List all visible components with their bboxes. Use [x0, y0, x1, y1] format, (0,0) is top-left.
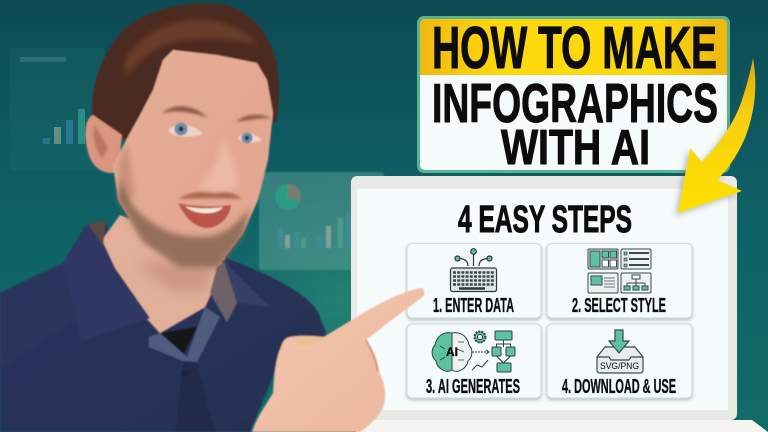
laptop base: [356, 420, 768, 432]
AI text on brain: AI: [446, 345, 458, 359]
heading: 4 easy steps: 4 EASY STEPS: [458, 199, 632, 241]
card 2: select style: [547, 244, 692, 318]
face side shading: [118, 142, 135, 205]
title line 3: WITH AI: [501, 121, 650, 175]
undershirt: [160, 327, 197, 356]
eyebrows: [162, 106, 208, 118]
icon: four layout templates: [588, 249, 651, 293]
card 1: enter data: [407, 244, 541, 318]
icon: AI brain to flowchart: [432, 331, 515, 372]
collar right: [220, 257, 270, 307]
arrow: yellow curved: [675, 58, 755, 216]
beard shading: [118, 178, 250, 268]
yellow title band: [420, 19, 727, 75]
right eye: [238, 133, 262, 143]
ear: [85, 115, 122, 173]
nose: [199, 140, 237, 191]
label: 2. SELECT STYLE: [572, 295, 666, 317]
shirt placket: [149, 307, 220, 362]
person: [0, 3, 424, 432]
laptop screen: [357, 189, 728, 410]
neck: [102, 215, 225, 333]
hair highlight: [125, 20, 258, 78]
label: 1. ENTER DATA: [433, 295, 514, 317]
ghost dashboard panel: bar chart: [10, 48, 105, 170]
thumb: [292, 336, 325, 346]
collar left: [63, 224, 150, 341]
hair base: [92, 3, 279, 140]
knuckle crease: [366, 340, 378, 372]
laptop: [351, 176, 768, 432]
ghost dashboard panel: pie and bars: [259, 172, 384, 270]
icon: download tray: [597, 330, 643, 373]
face: [113, 50, 273, 268]
card 4: download and use: [547, 324, 692, 398]
moustache: [178, 192, 242, 199]
laptop lid: [351, 176, 737, 420]
card 3: AI generates: [407, 324, 541, 398]
hand: [252, 288, 424, 432]
label: 4. DOWNLOAD & USE: [562, 376, 676, 398]
icon: keyboard with circuit nodes: [450, 249, 496, 292]
shirt: [0, 222, 327, 432]
left eye: [168, 125, 203, 137]
title box: [417, 15, 730, 175]
tray text: SVG/PNG: [600, 361, 639, 371]
mouth: [178, 203, 231, 228]
label: 3. AI GENERATES: [426, 376, 520, 398]
